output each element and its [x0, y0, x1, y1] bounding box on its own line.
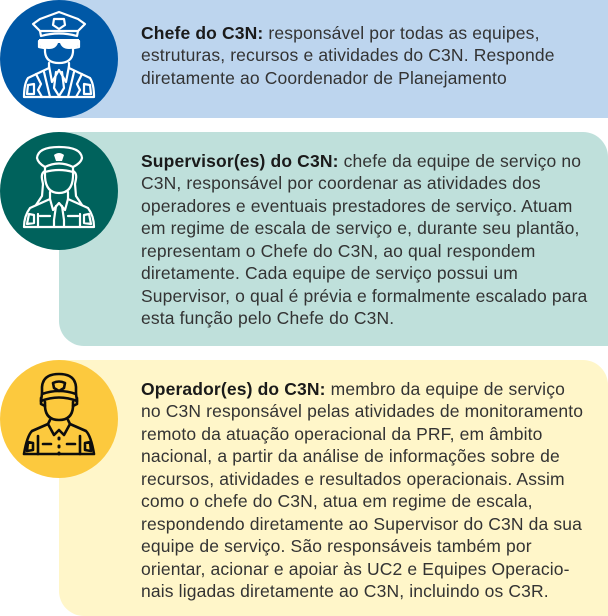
panel: Chefe do C3N background	[59, 0, 608, 118]
text block: Operador do C3N: no C3N responsável pelas atividades de monitoramento	[141, 401, 583, 421]
text block: Operador do C3N: nais ligadas diretamente ao C3N, incluindo os C3R.	[141, 581, 549, 601]
icon: operator with cap	[0, 360, 118, 478]
text block: Supervisor do C3N: Supervisor, o qual é prévia e formalmente escalado para	[141, 286, 587, 306]
text block: Chefe do C3N	[141, 23, 555, 88]
text block: Supervisor do C3N: esta função pelo Chefe do C3N.	[141, 308, 394, 328]
panel: Supervisor background	[59, 132, 608, 346]
text block: Operador do C3N	[141, 379, 583, 601]
panel: Operador background	[59, 360, 608, 616]
text block: Operador do C3N: como o chefe do C3N, atua em regime de escala,	[141, 491, 533, 511]
text block: Operador do C3N: remoto da atuação operacional da PRF, em âmbito	[141, 424, 543, 444]
text block: Chefe do C3N: diretamente ao Coordenador de Planejamento	[141, 68, 507, 88]
text block: Operador do C3N: Operador(es) do C3N: membro da equipe de serviço	[141, 379, 565, 399]
icon: chief officer with cap and sunglasses	[0, 0, 118, 118]
text block: Operador do C3N: equipe de serviço. São responsáveis também por	[141, 536, 532, 556]
text block: Supervisor do C3N: em regime de escala de serviço e, durante seu plantão,	[141, 218, 580, 238]
text block: Operador do C3N: nacional, a partir da análise de informações sobre de	[141, 446, 560, 466]
text block: Supervisor do C3N: C3N, responsável por coordenar as atividades dos	[141, 173, 541, 193]
text block: Supervisor do C3N: Supervisor(es) do C3N: chefe da equipe de serviço no	[141, 151, 581, 171]
text block: Operador do C3N: orientar, acionar e apoiar às UC2 e Equipes Operacio-	[141, 559, 570, 579]
text block: Operador do C3N: recursos, atividades e resultados operacionais. Assim	[141, 469, 565, 489]
text block: Chefe do C3N: Chefe do C3N: responsável por todas as equipes,	[141, 23, 540, 43]
text block: Supervisor do C3N: representam o Chefe do C3N, ao qual respondem	[141, 241, 535, 261]
text block: Operador do C3N: respondendo diretamente ao Supervisor do C3N da sua	[141, 514, 582, 534]
text block: Supervisor do C3N	[141, 151, 588, 328]
text block: Supervisor do C3N: diretamente. Cada equipe de serviço possui um	[141, 263, 518, 283]
text block: Chefe do C3N: estruturas, recursos e atividades do C3N. Responde	[141, 45, 555, 65]
text block: Supervisor do C3N: operadores e eventuais prestadores de serviço. Atuam	[141, 196, 572, 216]
icon: female supervisor with cap	[0, 132, 118, 250]
